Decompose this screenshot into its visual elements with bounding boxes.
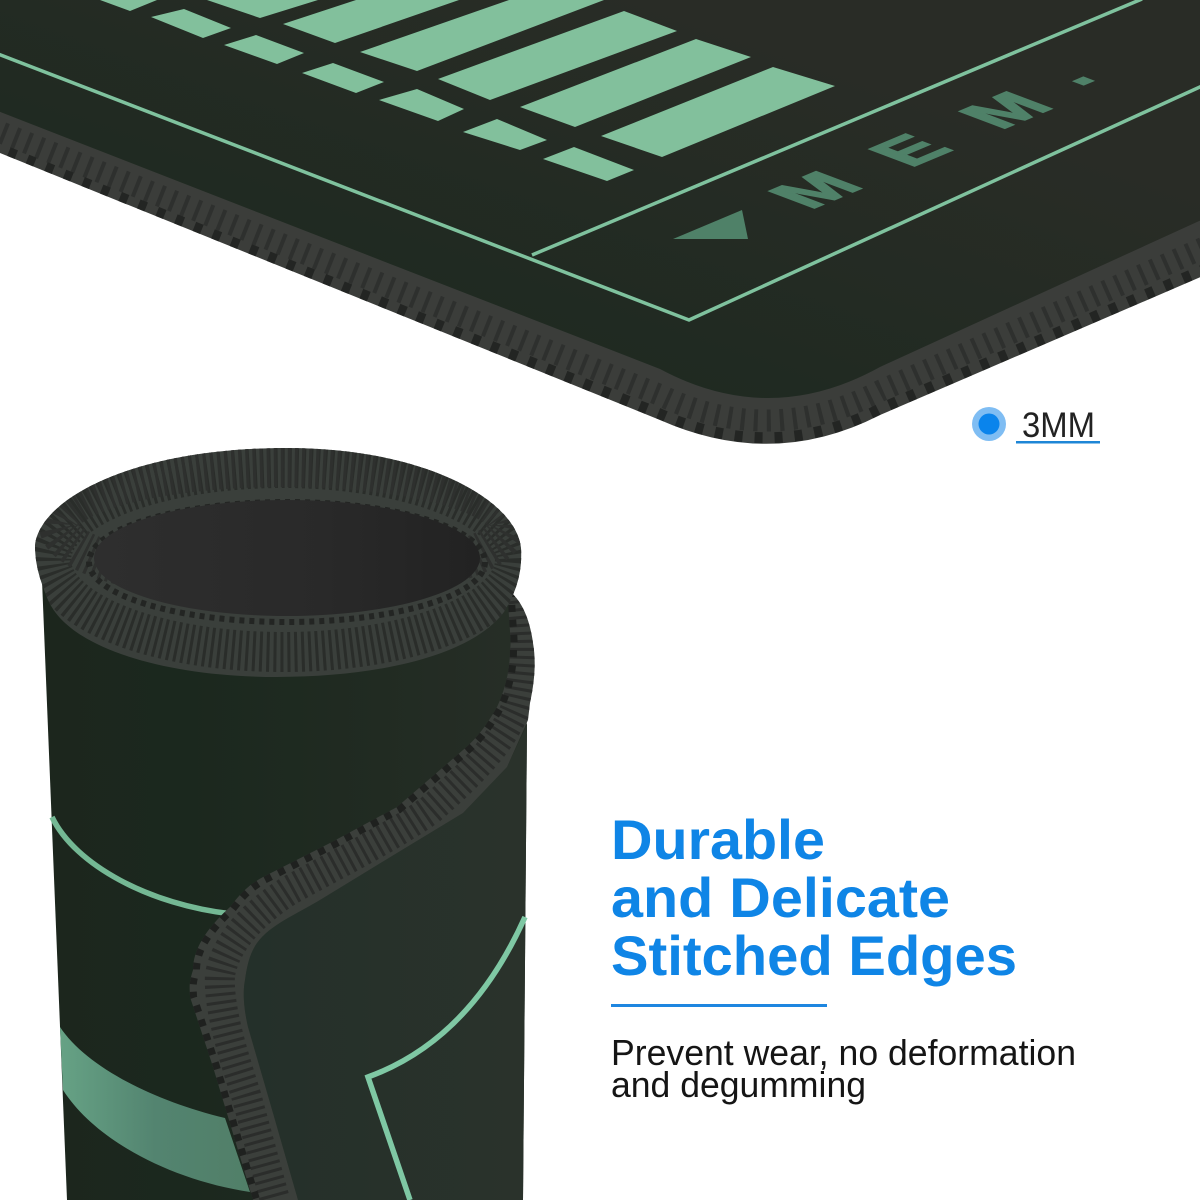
feature text panel — [611, 808, 1076, 1105]
mouse pad corner — [0, 0, 1200, 490]
printed MEM label: MEM. — [738, 57, 1126, 216]
heading: Stitched Edges — [611, 924, 1017, 987]
roll body — [42, 580, 527, 1200]
underline — [1016, 441, 1100, 444]
short bars — [100, 0, 634, 181]
left wide green band — [60, 1027, 250, 1192]
description: and degumming — [611, 1064, 866, 1105]
thickness label: 3MM — [1022, 406, 1095, 445]
rim stitching — [30, 440, 525, 680]
heading rule — [611, 1004, 827, 1007]
3MM thickness callout — [972, 406, 1100, 445]
description — [611, 1032, 1076, 1105]
right green line and corner — [368, 917, 525, 1200]
outer flap — [244, 725, 527, 1200]
flap stitching — [180, 580, 540, 1200]
roll opening — [94, 500, 480, 616]
description: Prevent wear, no deformation — [611, 1032, 1076, 1073]
rolled mouse pad — [30, 440, 540, 1200]
long bars — [207, 0, 835, 157]
pad surface — [0, 0, 1200, 398]
heading — [611, 808, 1017, 987]
stitched edge — [0, 112, 1200, 444]
left thin green line — [52, 817, 232, 914]
blue dot — [972, 407, 1006, 441]
heading: Durable — [611, 808, 825, 871]
triangle marker — [673, 210, 748, 239]
printed frame lines — [0, 0, 1200, 320]
heading: and Delicate — [611, 866, 950, 929]
